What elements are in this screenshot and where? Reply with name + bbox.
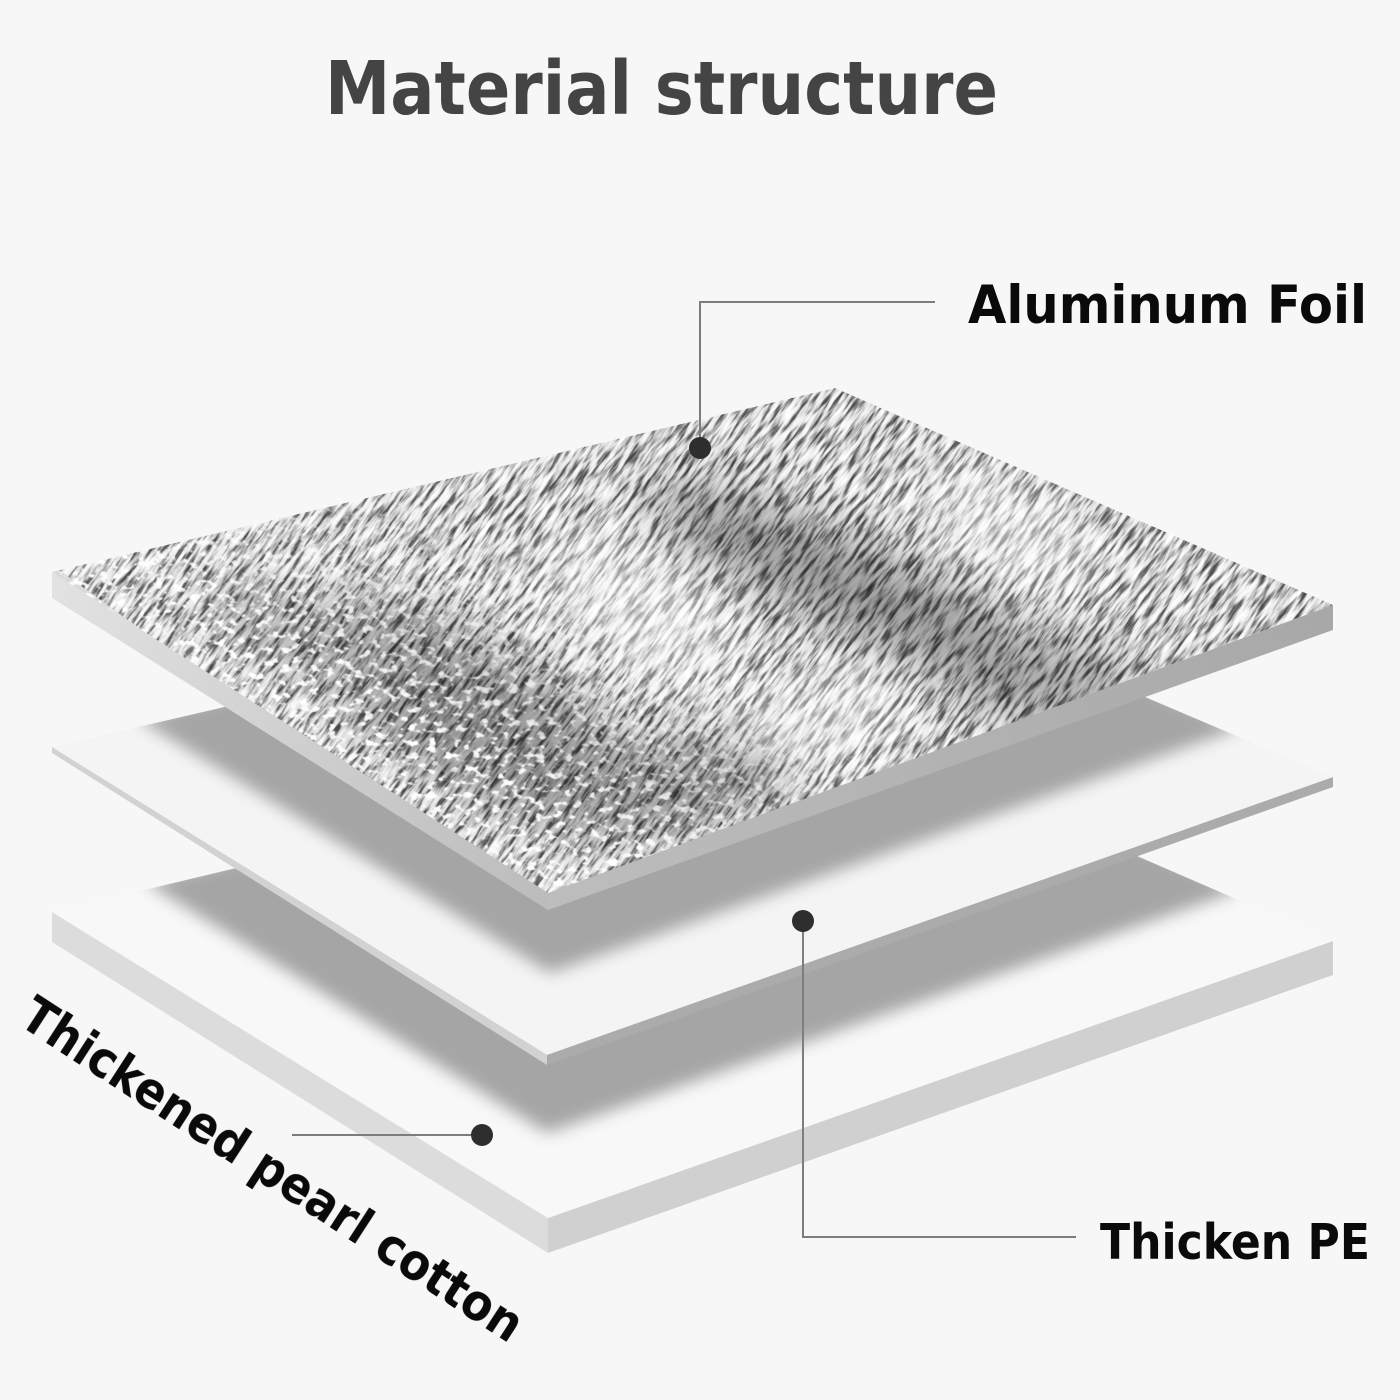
callout: thickened pearl cotton: Thickened pearl cotton [10, 985, 534, 1354]
layer: thickened pearl cotton board [52, 850, 1333, 1253]
callout: aluminum foil: Aluminum Foil [968, 275, 1367, 336]
layer: aluminum foil board [52, 388, 1333, 910]
callout: thicken PE: Thicken PE [1100, 1214, 1370, 1271]
layer: thicken PE board [52, 684, 1333, 1065]
title: Material structure [325, 46, 998, 132]
callout: aluminum foil [689, 275, 1367, 459]
callout: thicken PE [792, 910, 1370, 1271]
